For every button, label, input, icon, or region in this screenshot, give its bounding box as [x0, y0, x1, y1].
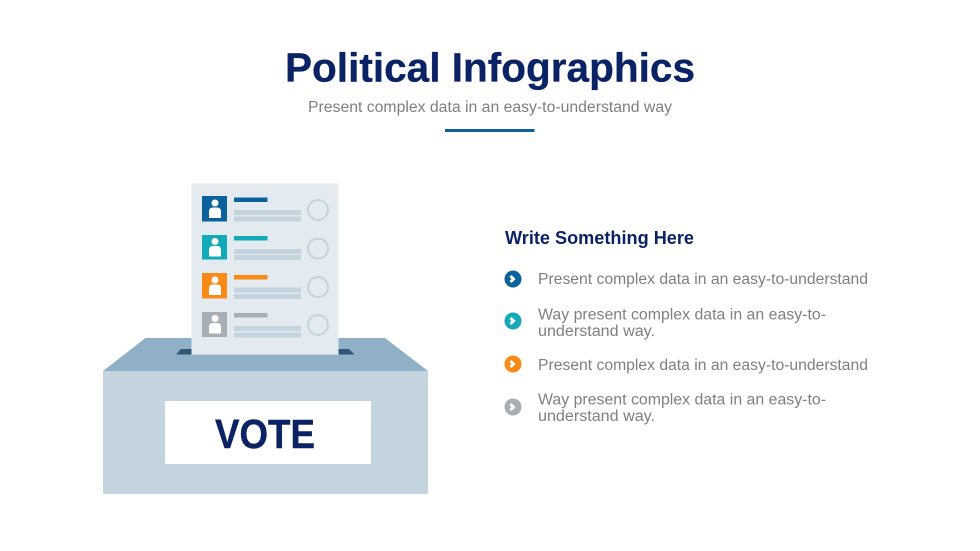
list item 4 — [504, 392, 826, 425]
icon: blue chevron bullet — [504, 270, 522, 288]
candidate row 4 — [202, 312, 328, 338]
box front — [103, 371, 428, 494]
candidate row 1 — [202, 196, 328, 222]
title underline — [445, 129, 534, 132]
box lid — [103, 338, 428, 371]
list item 2 — [504, 306, 826, 340]
vote label — [165, 401, 371, 464]
ballot slot — [176, 349, 354, 354]
icon: grey chevron bullet — [504, 398, 522, 416]
list item 4: understand way. — [538, 408, 655, 425]
list item 2: understand way. — [538, 323, 655, 340]
list item 4: Way present complex data in an easy-to- — [538, 392, 826, 408]
vote label: VOTE — [215, 411, 315, 457]
candidate row 3 — [202, 273, 328, 299]
section heading: Write Something Here — [505, 227, 694, 248]
list item 2: Way present complex data in an easy-to- — [538, 306, 826, 324]
ballot paper — [192, 184, 338, 355]
title: Political Infographics — [285, 44, 695, 90]
list item 1: Present complex data in an easy-to-understand — [538, 271, 868, 288]
list item 3: Present complex data in an easy-to-understand — [538, 357, 868, 374]
ballot box illustration — [103, 184, 428, 494]
candidate row 2 — [202, 235, 328, 260]
icon: teal chevron bullet — [504, 312, 522, 330]
subtitle: Present complex data in an easy-to-understand way — [308, 99, 672, 116]
icon: orange chevron bullet — [504, 356, 522, 372]
